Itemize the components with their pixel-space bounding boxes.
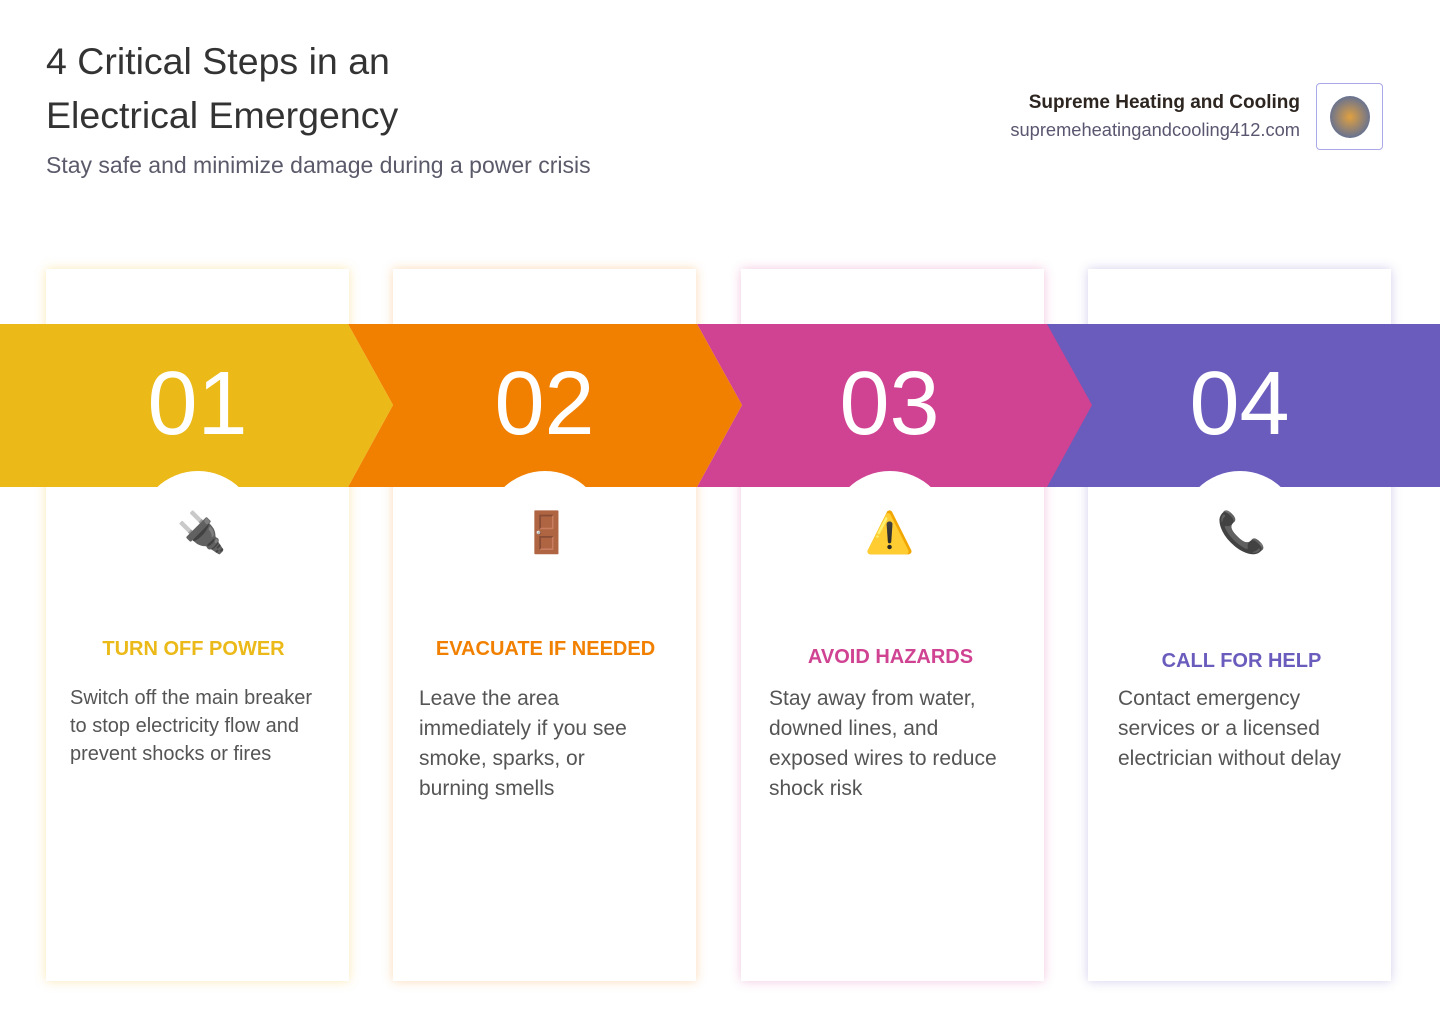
step 4 heading: CALL FOR HELP bbox=[1162, 650, 1321, 672]
subtitle: Stay safe and minimize damage during a power crisis bbox=[46, 152, 591, 178]
step 4 text: services or a licensed bbox=[1118, 717, 1320, 740]
numbers: 01 bbox=[147, 354, 248, 454]
icon: warning: ⚠️ bbox=[865, 510, 914, 556]
step 2 text: burning smells bbox=[419, 777, 554, 800]
icon: door: 🚪 bbox=[522, 510, 571, 556]
arrow band bbox=[0, 324, 1440, 487]
step 1 heading: TURN OFF POWER bbox=[102, 638, 285, 660]
step 1 text: Switch off the main breaker bbox=[70, 687, 312, 709]
logo bbox=[1316, 83, 1383, 150]
brand block bbox=[1010, 92, 1300, 140]
text: 03 bbox=[839, 354, 940, 454]
title bbox=[46, 40, 398, 136]
card 4 bbox=[1088, 269, 1391, 981]
brand block: supremeheatingandcooling412.com bbox=[1010, 119, 1300, 140]
step 3 text bbox=[769, 687, 997, 800]
text: 04 bbox=[1189, 354, 1290, 454]
icon: plug: 🔌 bbox=[177, 510, 226, 556]
step 3 heading: AVOID HAZARDS bbox=[808, 646, 973, 668]
step 2 heading: EVACUATE IF NEEDED bbox=[436, 638, 655, 660]
step 3 text: exposed wires to reduce bbox=[769, 747, 997, 770]
step 4 text: electrician without delay bbox=[1118, 747, 1341, 770]
card 1 bbox=[46, 269, 349, 981]
card 3 bbox=[741, 269, 1044, 981]
step 3 text: shock risk bbox=[769, 777, 862, 800]
step 1 text: to stop electricity flow and bbox=[70, 715, 299, 737]
step 1 text bbox=[70, 687, 312, 765]
brand block: Supreme Heating and Cooling bbox=[1029, 92, 1300, 113]
title: Electrical Emergency bbox=[46, 94, 398, 136]
step 4 text bbox=[1118, 687, 1341, 770]
step 1 text: prevent shocks or fires bbox=[70, 743, 271, 765]
title: 4 Critical Steps in an bbox=[46, 40, 390, 82]
step 3 text: Stay away from water, bbox=[769, 687, 976, 710]
text: 02 bbox=[494, 354, 595, 454]
step 2 text: immediately if you see bbox=[419, 717, 627, 740]
icon: phone: 📞 bbox=[1217, 510, 1266, 556]
icon circles bbox=[138, 471, 258, 591]
step 4 text: Contact emergency bbox=[1118, 687, 1300, 710]
step 3 text: downed lines, and bbox=[769, 717, 938, 740]
card 2 bbox=[393, 269, 696, 981]
step 2 text: Leave the area bbox=[419, 687, 559, 710]
step 2 text bbox=[419, 687, 627, 800]
step 2 text: smoke, sparks, or bbox=[419, 747, 585, 770]
